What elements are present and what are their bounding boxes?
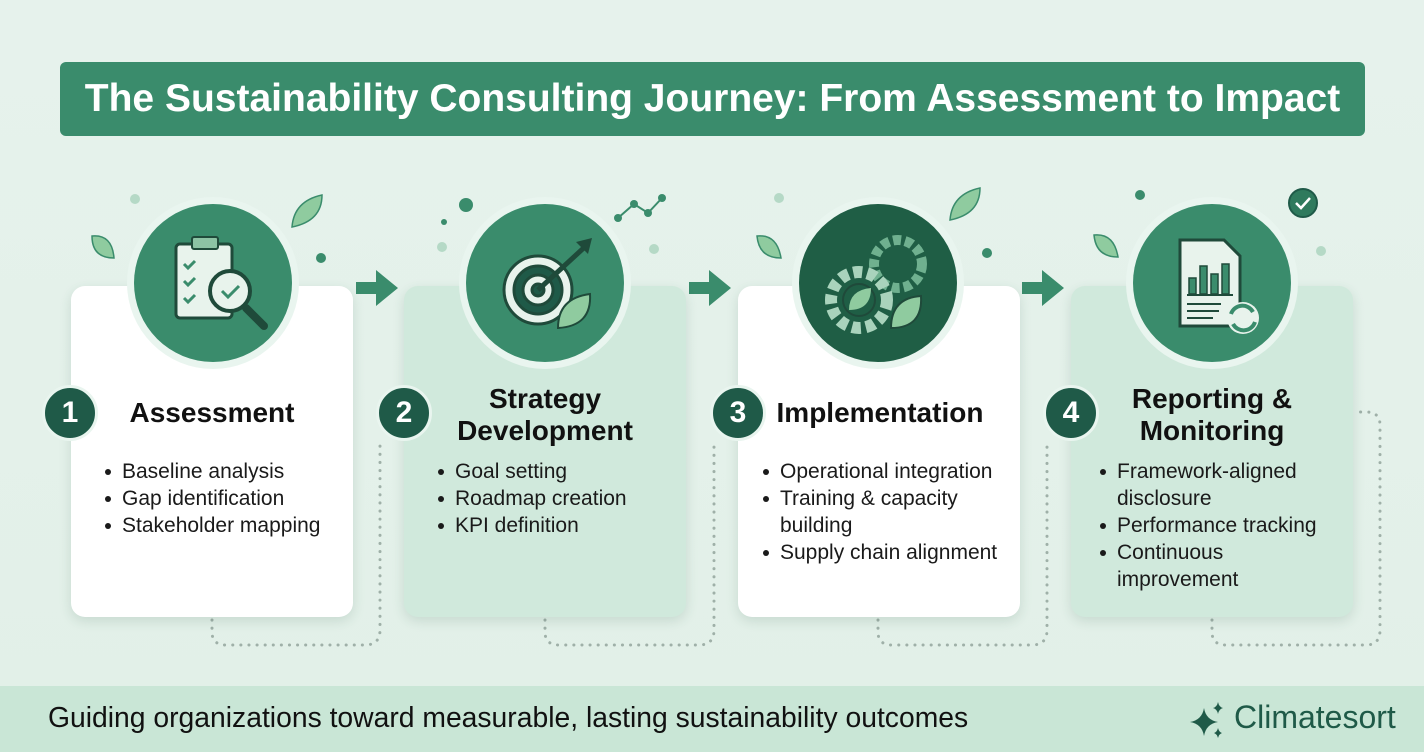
badge 1: 1 <box>62 396 78 429</box>
heading: reporting: Monitoring <box>1140 415 1284 446</box>
badge 4: 4 <box>1063 396 1079 429</box>
title: The Sustainability Consulting Journey: From Assessment to Impact <box>85 77 1340 120</box>
list: reporting <box>1100 460 1317 591</box>
list: implementation <box>763 460 997 564</box>
list: implementation: building <box>780 514 852 537</box>
badge 1 <box>42 385 98 441</box>
heading: strategy <box>457 383 633 446</box>
badge 3: 3 <box>730 396 746 429</box>
list: reporting: disclosure <box>1117 487 1212 510</box>
icon: clipboard <box>127 197 299 369</box>
arrows <box>356 270 1064 306</box>
list: implementation: Supply chain alignment <box>780 541 997 564</box>
title <box>60 62 1365 136</box>
list: strategy <box>438 460 627 537</box>
logo: Climatesort <box>1234 699 1396 735</box>
panel: reporting <box>1071 286 1353 617</box>
list: implementation: Training & capacity <box>780 487 958 510</box>
list: assessment: Baseline analysis <box>122 460 284 483</box>
icon: target <box>459 197 631 369</box>
badge 3 <box>710 385 766 441</box>
panel: implementation <box>738 286 1020 617</box>
heading: assessment: Assessment <box>130 397 294 428</box>
list: reporting: Continuous <box>1117 541 1223 564</box>
footer tagline: Guiding organizations toward measurable, lasting sustainability outcomes <box>48 701 968 733</box>
heading: strategy: Development <box>457 415 633 446</box>
list: implementation: Operational integration <box>780 460 992 483</box>
badge 2: 2 <box>396 396 412 429</box>
icon: gears <box>792 197 964 369</box>
heading: reporting: Reporting & <box>1132 383 1292 414</box>
list: reporting: improvement <box>1117 568 1238 591</box>
list: reporting: Framework-aligned <box>1117 460 1297 483</box>
list: strategy: Goal setting <box>455 460 567 483</box>
list: assessment <box>105 460 320 537</box>
list: reporting: Performance tracking <box>1117 514 1317 537</box>
heading: reporting <box>1132 383 1292 446</box>
icon: leaves decorative <box>92 188 1118 258</box>
footer band <box>0 686 1424 752</box>
list: strategy: Roadmap creation <box>455 487 627 510</box>
icon: report <box>1126 197 1298 369</box>
list: assessment: Gap identification <box>122 487 284 510</box>
panel: assessment <box>71 286 353 617</box>
badge 4 <box>1043 385 1099 441</box>
heading: strategy: Strategy <box>489 383 601 414</box>
badge 2 <box>376 385 432 441</box>
list: assessment: Stakeholder mapping <box>122 514 320 537</box>
list: strategy: KPI definition <box>455 514 579 537</box>
panel: strategy <box>404 286 686 617</box>
heading: implementation: Implementation <box>777 397 983 428</box>
